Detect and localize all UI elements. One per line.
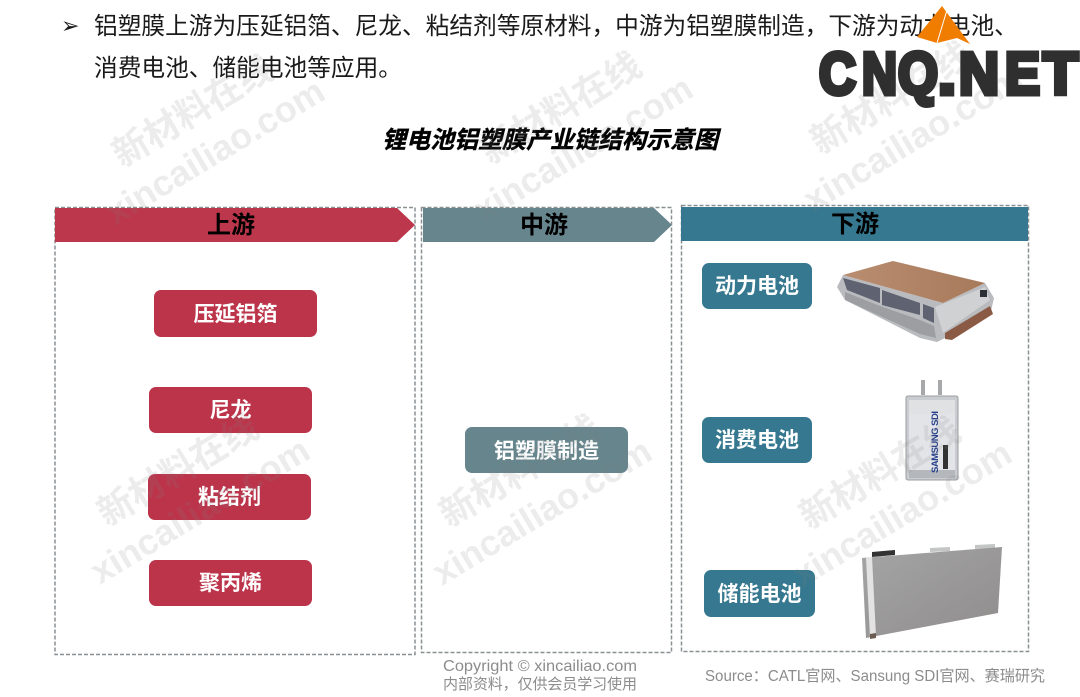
box: nylon: 尼龙 <box>210 399 252 422</box>
intro bullet text <box>61 13 1018 82</box>
copyright note: Copyright © xincailiao.com <box>443 658 637 675</box>
logo: CNQ.NET: . <box>938 41 956 107</box>
box: power battery <box>702 263 812 309</box>
icon: energy storage battery cell <box>862 544 1002 639</box>
upstream header arrow <box>55 208 415 242</box>
source note: Source：CATL官网、Sansung SDI官网、赛瑞研究 <box>705 666 1045 685</box>
box: nylon <box>149 387 312 433</box>
box: polypropylene: 聚丙烯 <box>199 572 262 595</box>
title: 锂电池铝塑膜产业链结构示意图 <box>382 127 722 154</box>
box: rolled aluminium foil <box>154 290 317 337</box>
watermark: bottom middle: 新材料在线 <box>432 407 607 535</box>
box: polypropylene <box>149 560 312 606</box>
box: power battery: 动力电池 <box>715 275 799 298</box>
intro bullet text: ➢ <box>61 13 79 38</box>
panel: upstream <box>55 208 415 654</box>
watermark: top right: 新材料在线 <box>803 34 978 162</box>
box: consumer battery: 消费电池 <box>715 429 799 452</box>
panel: midstream <box>422 208 672 652</box>
watermark: top left: xincailiao.com <box>98 70 332 233</box>
icon: consumer pouch battery: SAMSUNG SDI <box>930 411 941 473</box>
logo mark: orange kite <box>917 6 970 44</box>
watermark: bottom right: xincailiao.com <box>785 432 1019 595</box>
logo: CNQ.NET: C <box>819 41 856 107</box>
box: rolled aluminium foil: 压延铝箔 <box>194 303 278 326</box>
intro bullet text: 铝塑膜上游为压延铝箔、尼龙、粘结剂等原材料，中游为铝塑膜制造，下游为动力电池、 <box>94 13 1018 40</box>
box: aluminium-plastic film manufacturing: 铝塑膜制造 <box>494 440 599 463</box>
copyright note <box>443 658 637 693</box>
watermark: bottom middle: xincailiao.com <box>425 430 659 593</box>
copyright note: 内部资料，仅供会员学习使用 <box>443 676 637 693</box>
midstream header arrow <box>423 208 672 242</box>
watermark: top right: xincailiao.com <box>796 57 1030 220</box>
watermark: bottom left: xincailiao.com <box>83 429 317 592</box>
icon: power battery pack <box>837 261 994 342</box>
watermark: top middle: xincailiao.com <box>466 67 700 230</box>
box: adhesive: 粘结剂 <box>198 486 261 509</box>
logo: CNQ.NET: N <box>862 41 897 107</box>
box: aluminium-plastic film manufacturing <box>465 427 628 473</box>
logo: CNQ.NET: E <box>1005 41 1040 107</box>
box: energy storage battery: 储能电池 <box>718 583 802 606</box>
watermark: bottom right: 新材料在线 <box>792 409 967 537</box>
watermark: top left: 新材料在线 <box>105 47 280 175</box>
box: consumer battery <box>702 417 812 463</box>
box: energy storage battery <box>704 570 815 617</box>
icon: consumer pouch battery <box>906 380 958 480</box>
midstream header arrow: 中游 <box>520 212 568 239</box>
watermark: bottom left: 新材料在线 <box>90 406 265 534</box>
panel: downstream <box>681 206 1028 652</box>
logo: CNQ.NET: Q <box>898 41 938 107</box>
downstream header: 下游 <box>831 211 879 238</box>
logo: CNQ.NET <box>819 6 1078 107</box>
intro bullet text: 消费电池、储能电池等应用。 <box>94 55 402 82</box>
downstream header <box>681 207 1028 241</box>
upstream header arrow: 上游 <box>207 212 255 239</box>
logo: CNQ.NET: T <box>1043 41 1078 107</box>
watermark: top middle: 新材料在线 <box>473 44 648 172</box>
logo: CNQ.NET: N <box>959 41 999 107</box>
box: adhesive <box>148 474 311 520</box>
